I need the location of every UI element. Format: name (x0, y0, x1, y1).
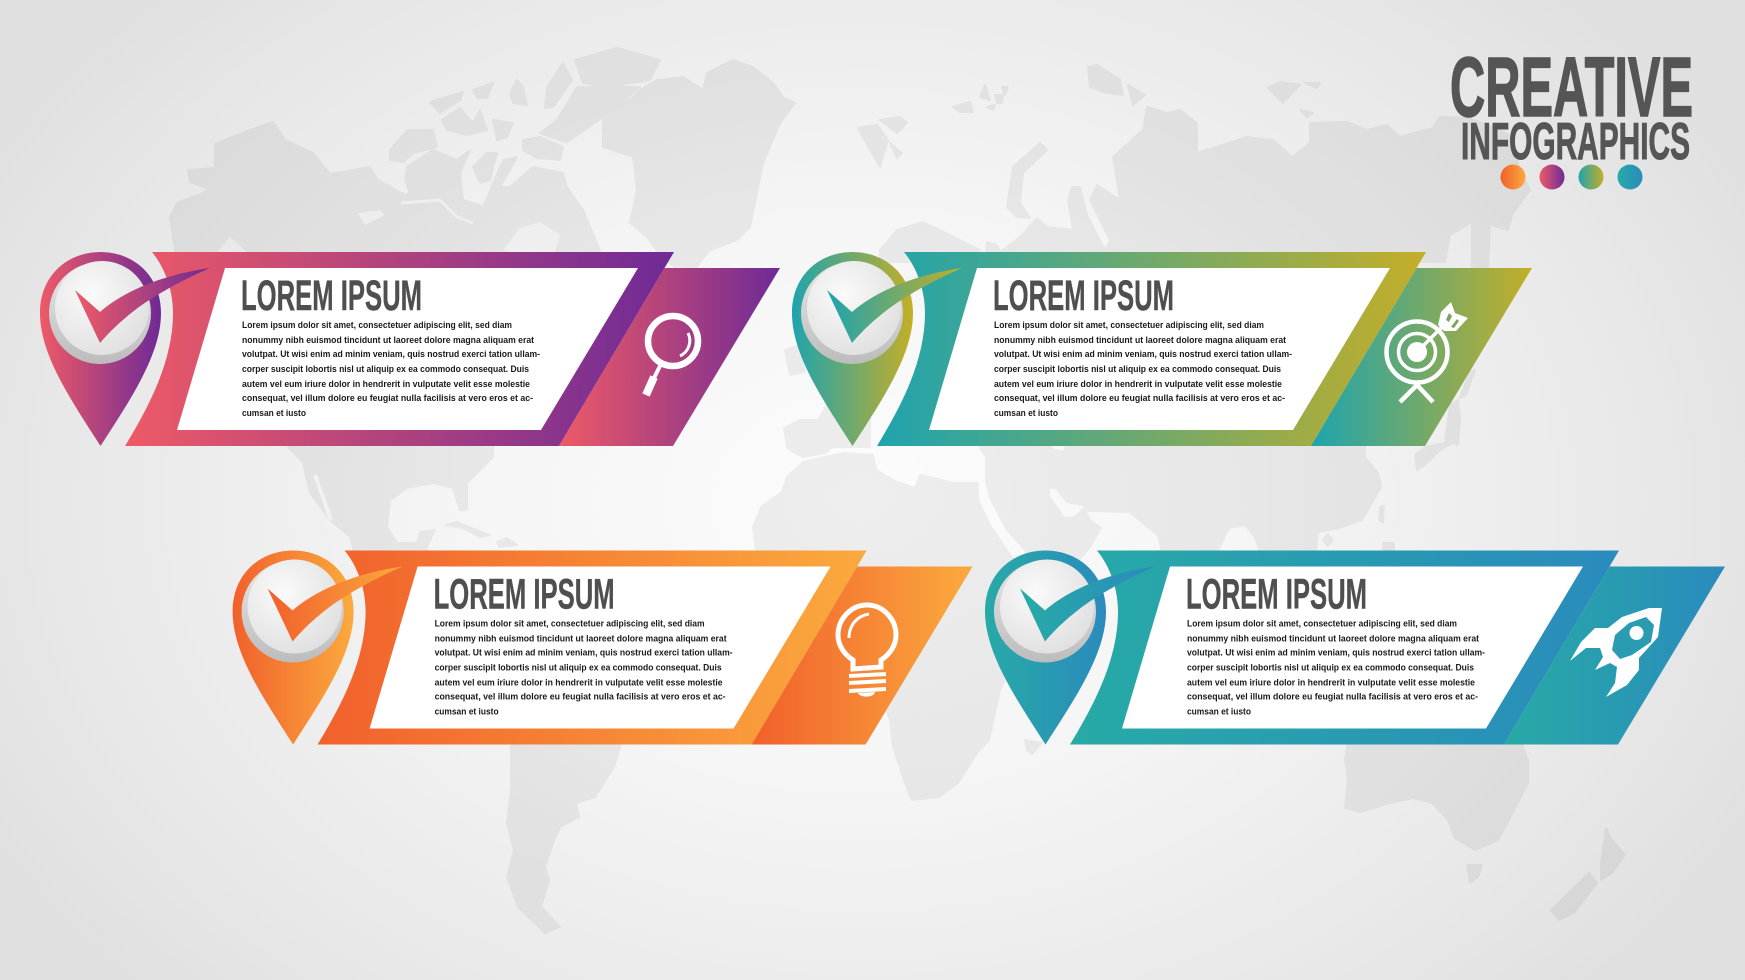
logo colour dots (1500, 164, 1642, 190)
icon: light bulb (838, 605, 896, 697)
heading: LOREM IPSUM (434, 572, 615, 618)
pin disc (994, 560, 1096, 662)
body text: volutpat. Ut wisi enim ad minim veniam, quis nostrud exerci tation ullam- (994, 348, 1292, 359)
pin disc (801, 261, 903, 364)
location pin (233, 550, 354, 744)
check mark (1020, 566, 1155, 642)
body text: corper suscipit lobortis nisl ut aliquip ex ea commodo consequat. Duis (435, 662, 722, 672)
tab (559, 268, 780, 446)
panel: card 3 orange (233, 550, 973, 744)
body text: corper suscipit lobortis nisl ut aliquip ex ea commodo consequat. Duis (994, 363, 1281, 374)
panel: card 2 teal olive (792, 252, 1532, 446)
body text: cumsan et iusto (994, 407, 1058, 418)
heading: LOREM IPSUM (241, 273, 422, 320)
pin disc (242, 560, 344, 662)
body text: autem vel eum iriure dolor in hendrerit in vulputate velit esse molestie (435, 676, 723, 688)
body text: nonummy nibh euismod tincidunt ut laoreet dolore magna aliquam erat (1187, 632, 1479, 644)
white text panel (1122, 566, 1583, 728)
body text: nonummy nibh euismod tincidunt ut laoreet dolore magna aliquam erat (242, 334, 534, 345)
body text: volutpat. Ut wisi enim ad minim veniam, quis nostrud exerci tation ullam- (1187, 646, 1485, 658)
body text: consequat, vel illum dolore eu feugiat nulla facilisis at vero eros et ac- (994, 392, 1285, 403)
world map (170, 48, 1625, 933)
band (125, 252, 674, 446)
white text panel (929, 268, 1390, 430)
body text: consequat, vel illum dolore eu feugiat nulla facilisis at vero eros et ac- (435, 690, 726, 702)
check mark (268, 566, 403, 642)
body text: consequat, vel illum dolore eu feugiat nulla facilisis at vero eros et ac- (1187, 690, 1478, 702)
body text: Lorem ipsum dolor sit amet, consectetuer adipiscing elit, sed diam (994, 319, 1264, 330)
body text: consequat, vel illum dolore eu feugiat nulla facilisis at vero eros et ac- (242, 392, 533, 403)
heading: LOREM IPSUM (993, 273, 1174, 320)
band (1070, 550, 1619, 744)
icon: target with arrow (1386, 302, 1468, 402)
body text: corper suscipit lobortis nisl ut aliquip ex ea commodo consequat. Duis (1187, 662, 1474, 672)
white text panel (177, 268, 638, 430)
body text: volutpat. Ut wisi enim ad minim veniam, quis nostrud exerci tation ullam- (242, 348, 540, 359)
body text: autem vel eum iriure dolor in hendrerit in vulputate velit esse molestie (994, 378, 1282, 389)
check mark (75, 268, 210, 343)
body text: volutpat. Ut wisi enim ad minim veniam, quis nostrud exerci tation ullam- (435, 646, 733, 658)
body text: corper suscipit lobortis nisl ut aliquip ex ea commodo consequat. Duis (242, 363, 529, 374)
body text (435, 618, 733, 716)
body text: cumsan et iusto (1187, 706, 1251, 716)
body text: autem vel eum iriure dolor in hendrerit in vulputate velit esse molestie (242, 378, 530, 389)
tab (1311, 268, 1532, 446)
body text: cumsan et iusto (435, 706, 499, 716)
band (318, 550, 867, 744)
body text (242, 319, 540, 418)
body text: nonummy nibh euismod tincidunt ut laoreet dolore magna aliquam erat (435, 632, 727, 644)
icon: magnifier (646, 316, 698, 395)
body text: cumsan et iusto (242, 407, 306, 418)
body text: Lorem ipsum dolor sit amet, consectetuer adipiscing elit, sed diam (435, 618, 705, 628)
body text (1187, 618, 1485, 716)
body text: Lorem ipsum dolor sit amet, consectetuer adipiscing elit, sed diam (242, 319, 512, 330)
tab (1504, 566, 1725, 744)
white text panel (370, 566, 831, 728)
pin disc (49, 261, 151, 364)
logo: Creative Infographics (1450, 40, 1693, 190)
heading: LOREM IPSUM (1186, 572, 1367, 618)
location pin (40, 252, 161, 446)
location pin (985, 550, 1106, 744)
check mark (827, 268, 962, 343)
panel: card 4 blue (985, 550, 1725, 744)
location pin (792, 252, 913, 446)
body text: autem vel eum iriure dolor in hendrerit in vulputate velit esse molestie (1187, 676, 1475, 688)
body text: Lorem ipsum dolor sit amet, consectetuer adipiscing elit, sed diam (1187, 618, 1457, 628)
tab (752, 566, 973, 744)
band (877, 252, 1426, 446)
panel: card 1 purple (40, 252, 780, 446)
icon: rocket (1570, 608, 1662, 697)
body text (994, 319, 1292, 418)
body text: nonummy nibh euismod tincidunt ut laoreet dolore magna aliquam erat (994, 334, 1286, 345)
